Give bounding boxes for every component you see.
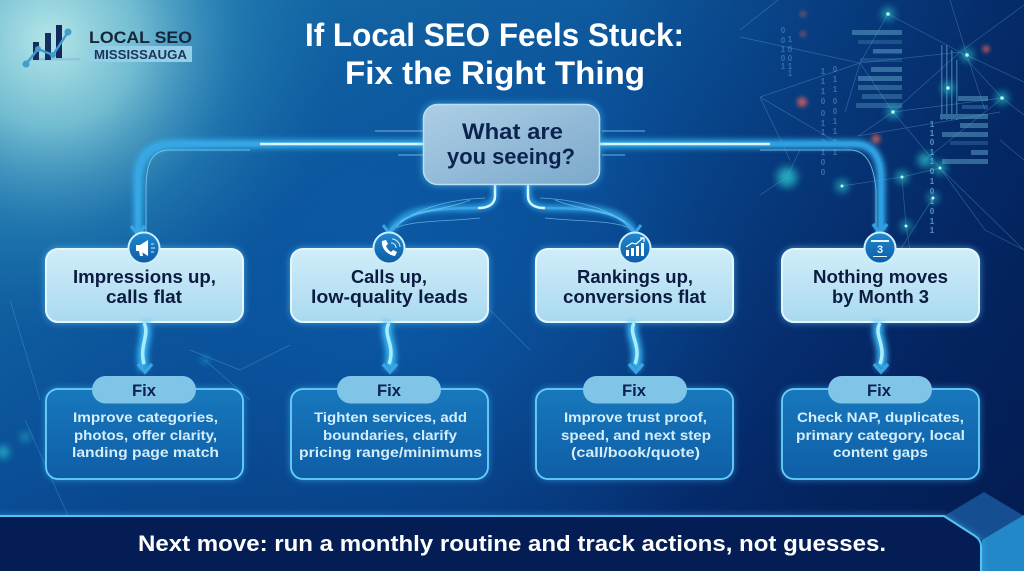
- binary digit columns: 0: [833, 138, 838, 147]
- binary digit columns: 1: [930, 197, 935, 206]
- fix box: boundaries, clarify: [323, 427, 457, 443]
- binary digit columns: 1: [821, 128, 826, 137]
- symptom card: Nothing moves: [813, 267, 948, 287]
- fix label pill: [92, 376, 196, 404]
- panel: calls up, low-quality leads: [291, 232, 488, 479]
- binary digit columns: 1: [930, 217, 935, 226]
- binary digit columns: 1: [781, 62, 786, 71]
- binary digit columns: 0: [788, 54, 793, 63]
- binary digit columns: 0: [781, 26, 786, 35]
- fix box: Improve trust proof,: [564, 409, 707, 425]
- binary digit columns: 0: [930, 207, 935, 216]
- symptom card: [291, 249, 488, 322]
- fix box: [536, 389, 733, 479]
- arrow: symptom to fix: [874, 323, 888, 372]
- fix box: [291, 389, 488, 479]
- symptom card: [536, 249, 733, 322]
- binary digit columns: 1: [833, 117, 838, 126]
- binary digit columns: [781, 26, 935, 235]
- decision box: what are you seeing: What are: [462, 119, 563, 144]
- fix box: Tighten services, add: [314, 409, 467, 425]
- connector: to left branch: [131, 131, 423, 234]
- fix label pill: [337, 376, 441, 404]
- data bar stack 1: [852, 30, 902, 108]
- panel: impressions up, calls flat: [46, 232, 243, 479]
- binary digit columns: 1: [788, 62, 793, 71]
- panel: rankings up, conversions flat: [536, 232, 733, 479]
- fix label pill: Fix: [377, 381, 402, 400]
- binary digit columns: 0: [930, 167, 935, 176]
- title: [305, 17, 684, 91]
- binary digit columns: 1: [930, 120, 935, 129]
- fix box: primary category, local: [796, 427, 965, 443]
- fix box: (call/book/quote): [571, 444, 700, 460]
- logo wordmark: LOCAL SEO: [89, 28, 192, 47]
- binary digit columns: 0: [821, 168, 826, 177]
- fix label pill: Fix: [867, 381, 892, 400]
- fix box: photos, offer clarity,: [74, 427, 217, 443]
- fix box: pricing range/minimums: [299, 444, 482, 460]
- binary digit columns: 1: [833, 148, 838, 157]
- binary digit columns: 0: [930, 138, 935, 147]
- fix box: Check NAP, duplicates,: [797, 409, 964, 425]
- binary digit columns: 0: [821, 97, 826, 106]
- arrow: symptom to fix: [138, 323, 152, 372]
- decorative corner cube: [944, 492, 1024, 571]
- binary digit columns: 1: [833, 75, 838, 84]
- binary digit columns: 1: [781, 45, 786, 54]
- binary digit columns: 1: [821, 119, 826, 128]
- binary digit columns: 0: [821, 158, 826, 167]
- binary digit columns: 1: [930, 129, 935, 138]
- binary digit columns: 1: [833, 127, 838, 136]
- fix box: speed, and next step: [561, 427, 711, 443]
- symptom card: calls flat: [106, 287, 182, 307]
- connector: to second branch: [383, 185, 495, 233]
- next move banner: Next move: run a monthly routine and track actions, not guesses.: [138, 531, 886, 556]
- icon: megaphone: [128, 232, 160, 264]
- decision box: what are you seeing: you seeing?: [447, 144, 575, 169]
- symptom card: Calls up,: [351, 267, 427, 287]
- fix box: [46, 389, 243, 479]
- binary digit columns: 1: [821, 148, 826, 157]
- symptom card: Rankings up,: [577, 267, 693, 287]
- symptom card: [782, 249, 979, 322]
- data bar stack 2: [940, 45, 988, 164]
- logo: Local SEO Mississauga: [22, 25, 192, 68]
- binary digit columns: 1: [930, 177, 935, 186]
- symptom card: conversions flat: [563, 287, 706, 307]
- binary digit columns: 1: [821, 87, 826, 96]
- binary digit columns: 0: [781, 54, 786, 63]
- icon: calendar month 3: 3: [877, 244, 883, 256]
- arrow: symptom to fix: [383, 323, 397, 372]
- title: If Local SEO Feels Stuck:: [305, 17, 684, 53]
- binary digit columns: 0: [788, 45, 793, 54]
- binary digit columns: 1: [788, 69, 793, 78]
- fix label pill: [583, 376, 687, 404]
- fix box: [782, 389, 979, 479]
- binary digit columns: 1: [930, 226, 935, 235]
- connector: to third branch: [528, 185, 641, 233]
- binary digit columns: 0: [821, 138, 826, 147]
- fix label pill: Fix: [622, 381, 647, 400]
- fix label pill: Fix: [132, 381, 157, 400]
- binary digit columns: 0: [930, 187, 935, 196]
- binary digit columns: 1: [821, 67, 826, 76]
- next move banner: [0, 516, 981, 571]
- decision box: what are you seeing: [423, 104, 600, 185]
- binary digit columns: 1: [788, 35, 793, 44]
- logo icon: bar chart with trend line: [22, 25, 80, 68]
- fix box: landing page match: [72, 444, 219, 460]
- binary digit columns: 1: [930, 148, 935, 157]
- icon: calendar month 3: [864, 232, 896, 264]
- binary digit columns: 0: [781, 36, 786, 45]
- glowing nodes: [0, 8, 1008, 458]
- panel: nothing moves by month 3: [782, 232, 979, 479]
- logo subtitle badge: MISSISSAUGA: [94, 48, 187, 62]
- icon: growth chart: [620, 232, 650, 264]
- fix box: Improve categories,: [73, 409, 218, 425]
- icon: phone: [374, 232, 404, 264]
- binary digit columns: 1: [930, 157, 935, 166]
- connector: to right branch: [600, 131, 887, 233]
- binary digit columns: 0: [833, 107, 838, 116]
- symptom card: Impressions up,: [73, 267, 216, 287]
- binary digit columns: 0: [833, 97, 838, 106]
- fix label pill: [828, 376, 932, 404]
- title: Fix the Right Thing: [345, 55, 645, 91]
- arrow: symptom to fix: [629, 323, 643, 372]
- binary digit columns: 1: [833, 85, 838, 94]
- binary digit columns: 0: [821, 109, 826, 118]
- symptom card: [46, 249, 243, 322]
- binary digit columns: 1: [821, 77, 826, 86]
- fix box: content gaps: [833, 444, 928, 460]
- symptom card: low-quality leads: [311, 287, 468, 307]
- symptom card: by Month 3: [832, 287, 929, 307]
- binary digit columns: 0: [833, 65, 838, 74]
